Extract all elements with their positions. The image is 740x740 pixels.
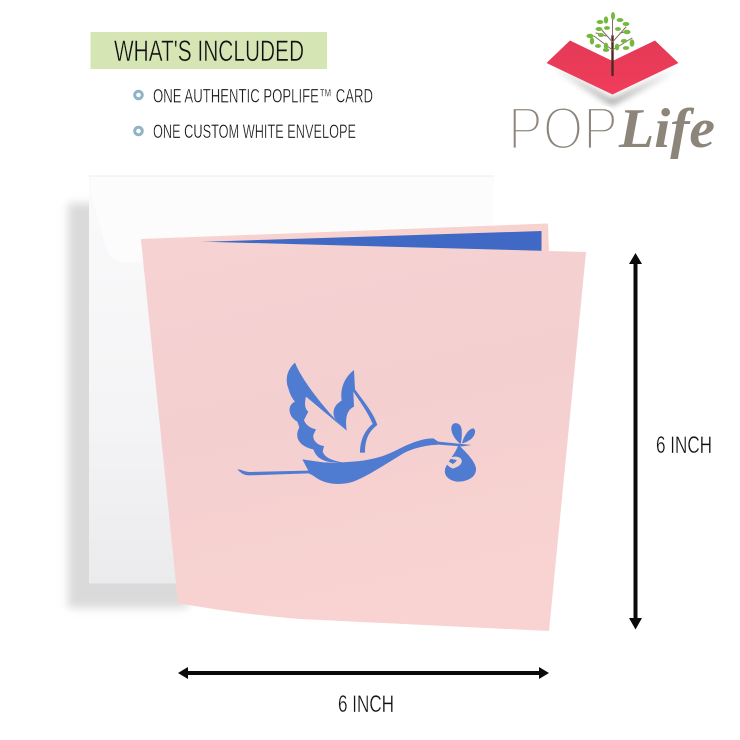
stork body, neck and beak: [237, 438, 472, 484]
heading: what's included: WHAT'S INCLUDED: [114, 35, 304, 68]
card back panel: [141, 224, 549, 253]
pop-up card: [141, 224, 586, 631]
item: authentic card: [135, 86, 373, 108]
stork cutout: [237, 363, 476, 484]
width arrow: [178, 667, 549, 679]
height arrow: [629, 253, 642, 630]
envelope body: [89, 176, 494, 584]
height label: 6 INCH: [656, 432, 712, 459]
card inner blue: [197, 231, 542, 252]
heading: what's included: [90, 32, 327, 69]
stork far wing: [334, 370, 377, 453]
logo icon: red open book with tree: [546, 12, 678, 105]
baby bundle: [445, 423, 476, 482]
width label: 6 INCH: [338, 691, 394, 718]
item: authentic card: ONE AUTHENTIC POPLIFE™ CARD: [153, 86, 373, 108]
logo wordmark: POP: POP: [508, 95, 618, 162]
envelope flap: [91, 176, 494, 262]
envelope: [68, 176, 494, 608]
list: included items: [135, 86, 373, 143]
card front panel: [141, 240, 586, 631]
logo wordmark: Life: Life: [618, 98, 715, 160]
envelope shadow: [68, 203, 188, 608]
stork near wing: [287, 363, 347, 463]
item: white envelope: [135, 121, 356, 143]
item: white envelope: ONE CUSTOM WHITE ENVELOPE: [153, 121, 356, 143]
logo: poplife: [508, 12, 715, 162]
